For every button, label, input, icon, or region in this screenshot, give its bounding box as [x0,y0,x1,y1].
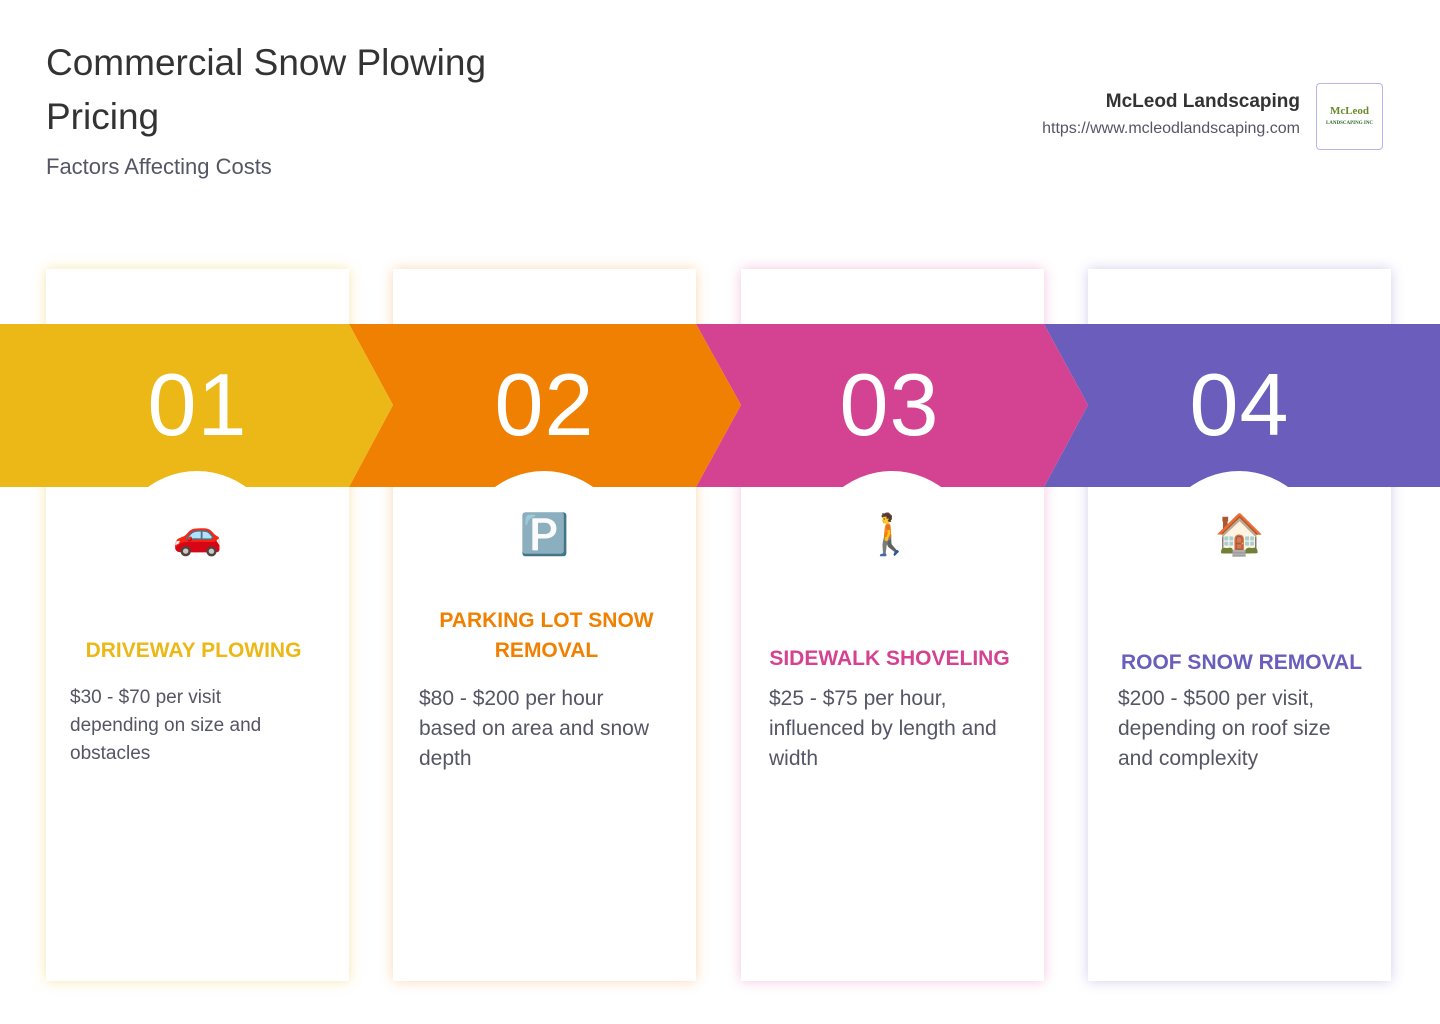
icon: house: 🏠 [1215,511,1264,558]
text 1: $30 - $70 per visit depending on size and obstacles [70,687,261,764]
brand url: https://www.mcleodlandscaping.com [1042,120,1300,137]
icon: parking: 🅿️ [520,511,569,558]
heading 2 [439,609,654,662]
heading 2: REMOVAL [495,639,598,662]
text 4: $200 - $500 per visit, depending on roof size and complexity [1118,687,1330,770]
segment 4 [1044,324,1440,487]
heading 2: PARKING LOT SNOW [439,609,654,632]
text 3: $25 - $75 per hour, influenced by length and width [769,687,997,770]
card 2 [393,269,696,981]
subtitle: Factors Affecting Costs [46,154,272,179]
icon: walking person: 🚶 [865,511,914,558]
text 2: $80 - $200 per hour based on area and snow depth [419,687,649,770]
heading 1: DRIVEWAY PLOWING [86,639,301,662]
number 01: 01 [148,355,247,454]
title: Commercial Snow Plowing Pricing [46,42,486,137]
segment 1 [0,324,393,487]
segment 2 [349,324,741,487]
number 03: 03 [840,355,939,454]
icon: car: 🚗 [173,511,222,558]
card 3 [741,269,1044,981]
number 04: 04 [1190,355,1289,454]
circle notches [114,471,1322,637]
logo [1316,83,1383,150]
card 4 [1088,269,1391,981]
number 02: 02 [495,355,594,454]
segment 3 [696,324,1088,487]
arrow band [0,324,1440,487]
brand name: McLeod Landscaping [1106,91,1300,112]
brand block [1042,83,1383,150]
logo: LANDSCAPING INC [1326,121,1373,126]
heading 4: ROOF SNOW REMOVAL [1121,651,1362,674]
card 1 [46,269,349,981]
heading 3: SIDEWALK SHOVELING [769,647,1010,670]
logo: McLeod [1330,105,1369,117]
